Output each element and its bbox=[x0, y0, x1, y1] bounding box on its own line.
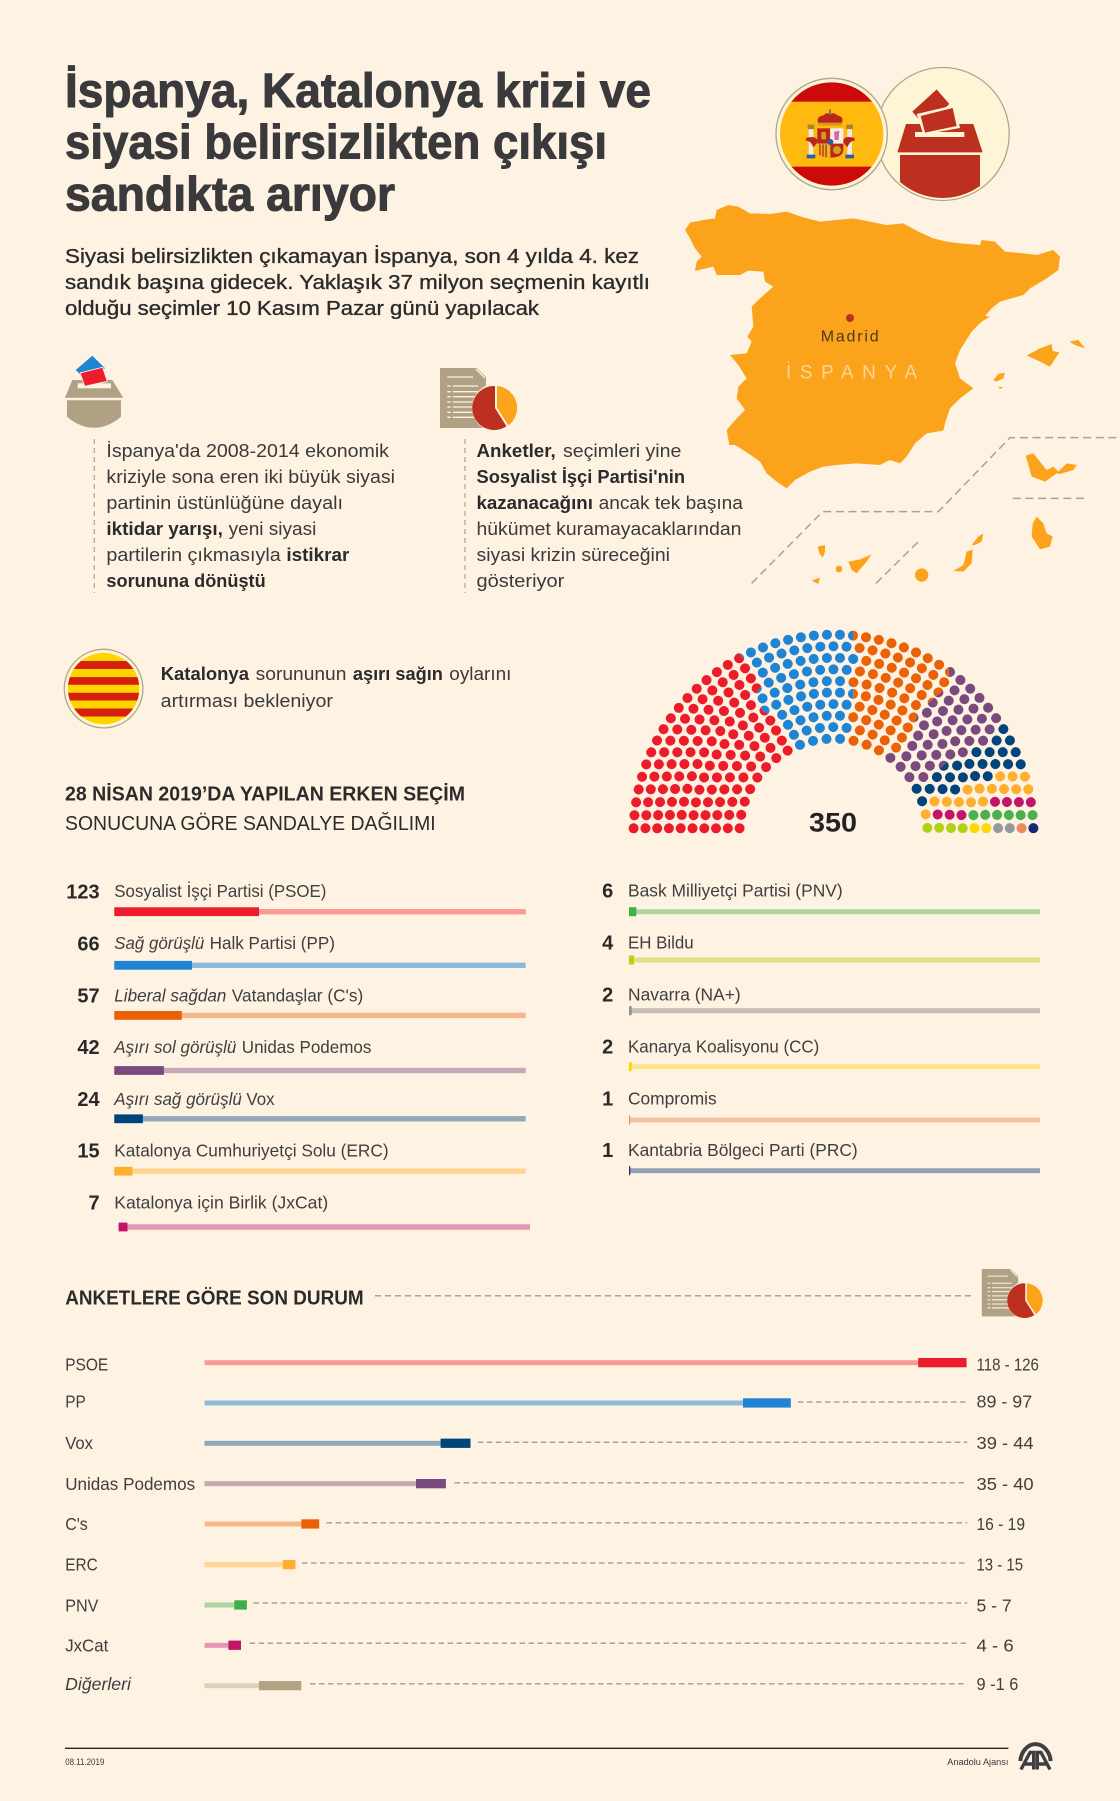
text block: Catalonia callout: aşırı sağın bbox=[353, 663, 443, 684]
poll row: JxCat bbox=[65, 1636, 1014, 1656]
poll row: ERC bbox=[65, 1555, 1023, 1575]
poll row: PNV: PNV bbox=[65, 1596, 99, 1616]
footer: Anadolu Ajansı bbox=[947, 1757, 1008, 1767]
bar: PP: 66 bbox=[77, 933, 100, 955]
poll row: Unidas Podemos: Unidas Podemos bbox=[65, 1474, 195, 1494]
poll row: PP: PP bbox=[65, 1392, 86, 1412]
poll row: PSOE: 118 - 126 bbox=[976, 1355, 1039, 1375]
poll row: C's: 16 - 19 bbox=[976, 1514, 1025, 1534]
text block: Catalonia callout: oylarını bbox=[449, 663, 511, 684]
bar: PP: Halk Partisi (PP) bbox=[210, 933, 335, 953]
icon: survey document with pie chart bbox=[440, 368, 520, 432]
text block: economic crisis: sorununa dönüştü bbox=[106, 570, 266, 591]
icon: Catalan flag bbox=[64, 649, 143, 728]
text block: polls: gösteriyor bbox=[476, 570, 564, 591]
title: sandıkta arıyor bbox=[65, 168, 395, 221]
poll row: PP bbox=[65, 1392, 1032, 1412]
bar: NA+ bbox=[602, 985, 1040, 1015]
poll row: Vox: Vox bbox=[65, 1433, 93, 1453]
icon: survey document small bbox=[982, 1269, 1045, 1319]
bar: PNV: 6 bbox=[602, 881, 613, 903]
poll row: JxCat: JxCat bbox=[65, 1636, 108, 1656]
text block: polls: ancak tek başına bbox=[599, 492, 744, 513]
bar: C's: Vatandaşlar (C's) bbox=[232, 985, 363, 1005]
bar: Unidas Podemos: Unidas Podemos bbox=[242, 1037, 372, 1057]
text block: economic crisis: İspanya'da 2008-2014 ekonomik bbox=[106, 440, 390, 461]
bar: JxCat: Katalonya için Birlik (JxCat) bbox=[114, 1193, 328, 1213]
footer: 08.11.2019 bbox=[65, 1757, 104, 1767]
poll row: others: Diğerleri bbox=[65, 1674, 132, 1694]
bar: NA+: 2 bbox=[602, 985, 613, 1007]
logo: AA bbox=[1020, 1744, 1051, 1770]
poll chart bbox=[65, 1355, 1039, 1694]
text block: Catalonia callout bbox=[161, 663, 511, 711]
title: İspanya, Katalonya krizi ve bbox=[65, 65, 651, 118]
icon: Spain flag and ballot box badges bbox=[776, 68, 1009, 200]
bar: C's: 57 bbox=[77, 985, 100, 1007]
bar: JxCat: 7 bbox=[88, 1193, 100, 1215]
bar: Vox: Aşırı sağ görüşlü bbox=[113, 1089, 242, 1109]
seat total: 350 bbox=[809, 808, 857, 838]
text block: polls: seçimleri yine bbox=[563, 440, 681, 461]
heading: seat distribution: 28 NİSAN 2019’DA YAPILAN ERKEN SEÇİM bbox=[65, 783, 465, 806]
poll row: Unidas Podemos bbox=[65, 1474, 1034, 1494]
text block: economic crisis: kriziyle sona eren iki büyük siyasi bbox=[106, 466, 395, 487]
bar: PRC bbox=[602, 1140, 1040, 1175]
bar: Compromis bbox=[602, 1088, 1040, 1124]
bar: PNV bbox=[602, 881, 1040, 916]
poll row: others: 9 -1 6 bbox=[976, 1674, 1018, 1694]
heading: seat distribution: SONUCUNA GÖRE SANDALYE DAĞILIMI bbox=[65, 812, 436, 835]
text block: polls: hükümet kuramayacaklarından bbox=[476, 518, 741, 539]
bar: EH Bildu bbox=[602, 932, 1040, 964]
text block: Catalonia callout: sorununun bbox=[256, 663, 346, 684]
bar: CC: 2 bbox=[602, 1036, 613, 1058]
title bbox=[65, 65, 651, 221]
bar: ERC bbox=[77, 1141, 526, 1176]
poll row: Vox: 39 - 44 bbox=[976, 1433, 1034, 1453]
seat bars: right column bbox=[602, 881, 1040, 1175]
bar: PP bbox=[77, 933, 526, 970]
text block: polls: Anketler, bbox=[476, 440, 556, 461]
icon: ballot box bbox=[65, 356, 123, 428]
bar: NA+: Navarra (NA+) bbox=[628, 985, 741, 1005]
bar: PSOE: Sosyalist İşçi Partisi (PSOE) bbox=[114, 881, 326, 901]
title: siyasi belirsizlikten çıkışı bbox=[65, 117, 607, 170]
poll row: PSOE bbox=[65, 1355, 1039, 1375]
poll row: PNV: 5 - 7 bbox=[976, 1596, 1012, 1616]
footer bbox=[65, 1744, 1051, 1770]
text block: economic crisis: partinin üstünlüğüne dayalı bbox=[106, 492, 343, 513]
text block: economic crisis bbox=[94, 439, 395, 593]
intro text bbox=[65, 245, 650, 320]
bar: JxCat bbox=[88, 1193, 530, 1231]
bar: Vox: 24 bbox=[77, 1089, 100, 1111]
poll row: ERC: 13 - 15 bbox=[976, 1555, 1023, 1575]
poll row: PP: 89 - 97 bbox=[976, 1392, 1032, 1412]
text block: Catalonia callout: artırması bekleniyor bbox=[161, 690, 333, 711]
poll row: PSOE: PSOE bbox=[65, 1355, 108, 1375]
poll row: Unidas Podemos: 35 - 40 bbox=[976, 1474, 1034, 1494]
bar: Unidas Podemos: 42 bbox=[77, 1037, 100, 1059]
bar: Unidas Podemos bbox=[77, 1037, 526, 1075]
text block: economic crisis: iktidar yarışı, bbox=[106, 518, 223, 539]
map of Spain bbox=[685, 205, 1120, 584]
bar: PRC: 1 bbox=[602, 1140, 613, 1162]
Madrid marker bbox=[846, 314, 854, 322]
intro text: Siyasi belirsizlikten çıkamayan İspanya, son 4 yılda 4. kez bbox=[65, 245, 639, 268]
poll row: others bbox=[65, 1674, 1018, 1694]
bar: C's bbox=[77, 985, 526, 1020]
poll row: ERC: ERC bbox=[65, 1555, 98, 1575]
bar: Compromis: Compromis bbox=[628, 1088, 717, 1108]
text block: polls: kazanacağını bbox=[476, 492, 593, 513]
bar: EH Bildu: EH Bildu bbox=[628, 932, 694, 952]
poll row: Vox bbox=[65, 1433, 1034, 1453]
heading: latest polls: ANKETLERE GÖRE SON DURUM bbox=[65, 1286, 364, 1309]
poll row: C's bbox=[65, 1514, 1025, 1534]
bar: CC: Kanarya Koalisyonu (CC) bbox=[628, 1036, 819, 1056]
bar: Vox: Vox bbox=[246, 1089, 275, 1109]
bar: Unidas Podemos: Aşırı sol görüşlü bbox=[113, 1037, 237, 1057]
intro text: olduğu seçimler 10 Kasım Pazar günü yapılacak bbox=[65, 298, 540, 320]
bar: ERC: Katalonya Cumhuriyetçi Solu (ERC) bbox=[114, 1141, 389, 1161]
bar: PNV: Bask Milliyetçi Partisi (PNV) bbox=[628, 881, 843, 901]
poll row: JxCat: 4 - 6 bbox=[976, 1636, 1014, 1656]
text block: polls bbox=[465, 439, 744, 593]
text block: economic crisis: yeni siyasi bbox=[229, 518, 316, 539]
bar: ERC: 15 bbox=[77, 1141, 100, 1163]
heading: seat distribution bbox=[65, 783, 465, 835]
bar: EH Bildu: 4 bbox=[602, 932, 614, 954]
text block: economic crisis: partilerin çıkmasıyla bbox=[106, 544, 281, 565]
bar: PP: Sağ görüşlü bbox=[114, 933, 205, 953]
bar: PSOE: 123 bbox=[66, 881, 100, 903]
bar: Vox bbox=[77, 1089, 526, 1123]
intro text: sandık başına gidecek. Yaklaşık 37 milyon seçmenin kayıtlı bbox=[65, 272, 650, 294]
bar: Compromis: 1 bbox=[602, 1088, 613, 1110]
poll row: PNV bbox=[65, 1596, 1012, 1616]
bar: PRC: Kantabria Bölgeci Parti (PRC) bbox=[628, 1140, 858, 1160]
poll row: C's: C's bbox=[65, 1514, 88, 1534]
text block: economic crisis: istikrar bbox=[286, 544, 349, 565]
text block: Catalonia callout: Katalonya bbox=[161, 663, 250, 684]
parliament seat chart bbox=[634, 635, 1033, 828]
bar: PSOE bbox=[66, 881, 526, 916]
text block: polls: Sosyalist İşçi Partisi'nin bbox=[476, 466, 685, 487]
map label: Madrid: Madrid bbox=[821, 329, 879, 346]
bar: CC bbox=[602, 1036, 1040, 1071]
bar: C's: Liberal sağdan bbox=[114, 985, 226, 1005]
text block: polls: siyasi krizin süreceğini bbox=[476, 544, 670, 565]
map label: İspanya: İSPANYA bbox=[786, 362, 917, 383]
seat bars: left column bbox=[66, 881, 530, 1231]
